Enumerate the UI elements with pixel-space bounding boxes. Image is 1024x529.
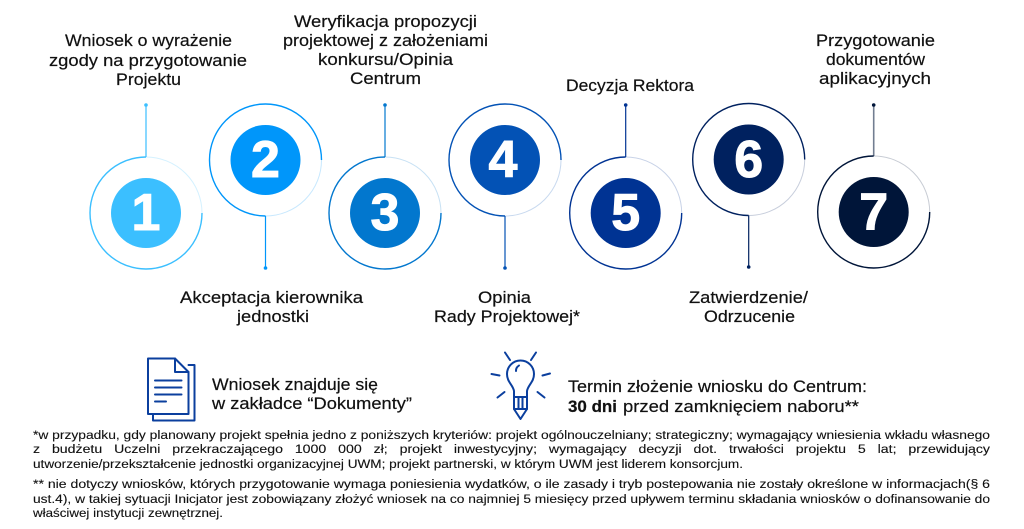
text: document location note: w zakładce “Dokumenty” [211,395,412,413]
text: document location note: Wniosek znajduje się [212,376,378,394]
label: step 6: Zatwierdzenie/ [689,289,808,307]
label: step 1: Wniosek o wyrażenie [65,32,232,50]
label: step 2: jednostki [236,308,309,326]
text: submission deadline note: Termin złożenie wniosku do Centrum: [568,378,867,396]
icon: documents [148,358,194,420]
label: step 4 [434,289,581,326]
text: submission deadline note: przed zamknięciem naboru** [623,398,860,416]
text: document location note [211,376,412,413]
label: step 7: dokumentów [826,51,925,69]
step 2 circle: 2 [251,131,280,189]
label: step 3: projektowej z założeniami [283,32,488,50]
step 3 circle: 3 [371,184,399,242]
footnote: single asterisk: z budżetu Uczelni przekraczającego 1000 000 zł; projekt inwestycyjny; wymagający decyzji dot. trwałości projektu 5 lat; przewidujący [33,442,991,456]
step 6 circle: 6 [734,131,763,189]
step 5 circle: 5 [611,184,640,242]
footnote: double asterisk: ust.4), w takiej sytuacji Inicjator jest zobowiązany złożyć wniosek na co najmniej 5 miesięcy przed upływem terminu składania wniosków o dofinansowanie do [33,492,990,506]
label: step 2 [180,289,364,326]
step 4 circle [449,104,561,270]
label: step 3: Centrum [350,70,421,88]
step 1 circle: 1 [132,184,160,242]
text: submission deadline note [568,378,867,416]
footnote: double asterisk: ** nie dotyczy wniosków, których przygotowanie wymaga poniesienia wydatków, o ile zasady i tryb postepowania nie zostały określone w informacjach(§ 6 [33,477,990,491]
label: step 5: Decyzja Rektora [566,77,695,95]
text: submission deadline note: 30 dni [568,398,617,416]
label: step 4: Opinia [478,289,532,307]
label: step 1: Projektu [116,71,181,89]
label: step 7: Przygotowanie [816,32,935,50]
label: step 1: zgody na przygotowanie [49,52,247,70]
step 4 circle: 4 [489,131,518,189]
step 2 circle [210,104,322,270]
label: step 6: Odrzucenie [704,308,795,326]
footnote: double asterisk [32,477,990,520]
label: step 1 [49,32,247,89]
footnote: single asterisk: utworzenie/przekształcenie jednostki organizacyjnej UWM; projekt partnerski, w którym UWM jest liderem konsorcjum. [33,457,743,471]
footnote: single asterisk: *w przypadku, gdy planowany projekt spełnia jedno z poniższych kryteriów: projekt ogólnouczelniany; strategiczny; wymagający wniesienia wkładu własnego [33,428,990,442]
icon: light bulb with pencil tip [492,352,550,419]
step 3 circle [329,103,441,269]
label: step 7: aplikacyjnych [819,70,931,88]
step 5 circle [570,103,682,269]
step 6 circle [693,104,805,269]
label: step 3 [283,13,488,88]
footnote: single asterisk [33,428,991,471]
step 7 circle [818,103,930,268]
label: step 3: konkursu/Opinia [318,51,454,69]
step 1 circle [90,103,202,269]
footnote: double asterisk: właściwej instytucji zewnętrznej. [32,506,223,520]
label: step 6 [689,289,808,326]
label: step 3: Weryfikacja propozycji [294,13,477,31]
step 7 circle: 7 [859,184,888,242]
label: step 2: Akceptacja kierownika [180,289,364,307]
label: step 7 [816,32,935,88]
label: step 4: Rady Projektowej* [434,308,581,326]
